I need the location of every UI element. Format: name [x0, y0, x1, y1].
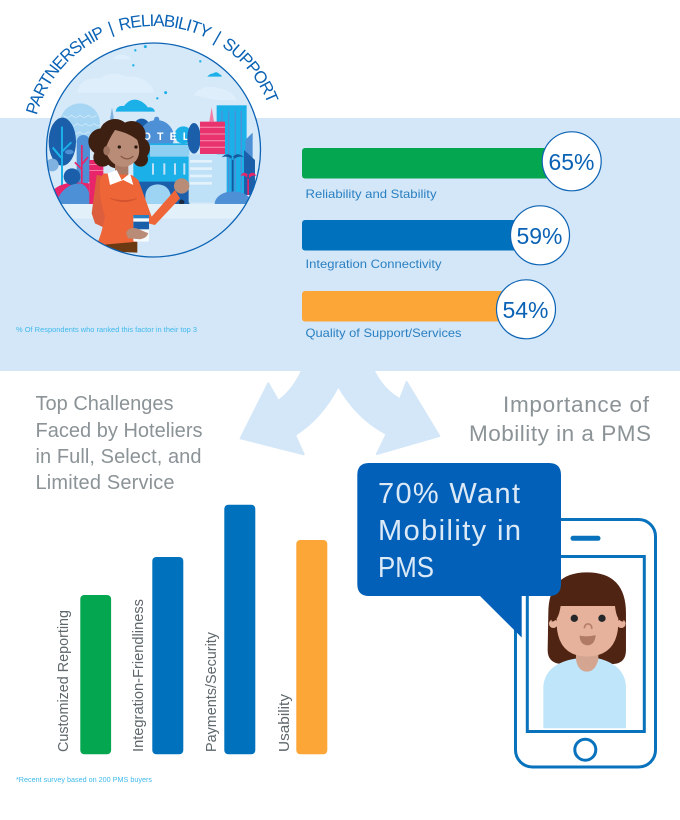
icon: geodesic dome	[60, 103, 102, 143]
callout: 70% want mobility: Mobility in	[378, 515, 521, 547]
icon: phone with person	[516, 520, 656, 767]
callout: 70% want mobility	[357, 463, 561, 638]
bar: customized reporting	[56, 595, 111, 754]
bar: support 54%	[302, 280, 556, 340]
panel: top survey band	[0, 118, 680, 371]
footnote: *Recent survey based on 200 PMS buyers	[16, 777, 153, 784]
bar: reliability 65%: 65%	[548, 149, 594, 175]
icon: woman with coffee	[88, 119, 189, 253]
heading: importance of mobility: Mobility in a PMS	[469, 421, 651, 446]
bar: integration 59%	[302, 206, 570, 271]
callout: 70% want mobility: 70% Want	[378, 478, 520, 510]
icon: clouds and sparkles	[116, 45, 222, 112]
heading: importance of mobility	[469, 392, 651, 446]
heading: importance of mobility: Importance of	[503, 392, 650, 417]
icon: left trees and hills	[46, 118, 103, 204]
circle outline	[46, 43, 260, 257]
heading: top challenges: Faced by Hoteliers	[36, 420, 202, 442]
icon: hotel building	[110, 107, 192, 205]
heading: top challenges	[36, 393, 202, 494]
ground strip	[62, 204, 245, 218]
bar: integration friendliness	[131, 557, 183, 754]
heading: top challenges: Top Challenges	[36, 393, 174, 415]
note: respondents: % Of Respondents who ranked this factor in their top 3	[16, 327, 197, 334]
arrows: split down to both sections	[241, 370, 439, 454]
title: curved tagline: PARTNERSHIP | RELIABILITY | SUPPORT	[26, 14, 279, 114]
illustration: hotelier in circle	[43, 43, 260, 262]
bar: usability	[277, 540, 327, 754]
bar: support 54%: Quality of Support/Services	[306, 326, 462, 340]
bar: usability: Usability	[277, 693, 293, 752]
bar: integration friendliness: Integration-Friendliness	[131, 599, 147, 752]
callout: 70% want mobility: PMS	[378, 552, 434, 584]
bar: customized reporting: Customized Reporting	[56, 610, 72, 752]
bar: integration 59%: 59%	[516, 223, 562, 249]
bar: payments security: Payments/Security	[204, 631, 220, 752]
bar: support 54%: 54%	[502, 297, 548, 323]
heading: top challenges: Limited Service	[36, 472, 174, 494]
bar: reliability 65%: Reliability and Stability	[306, 187, 436, 201]
bar: integration 59%: Integration Connectivity	[306, 257, 442, 271]
bar: payments security	[204, 505, 255, 754]
icon: hotel building: OTEL	[143, 131, 190, 143]
bar: reliability 65%	[302, 132, 601, 201]
bar chart: top challenges	[56, 505, 327, 754]
heading: top challenges: in Full, Select, and	[36, 446, 202, 468]
icon: city towers and palms	[187, 105, 256, 204]
